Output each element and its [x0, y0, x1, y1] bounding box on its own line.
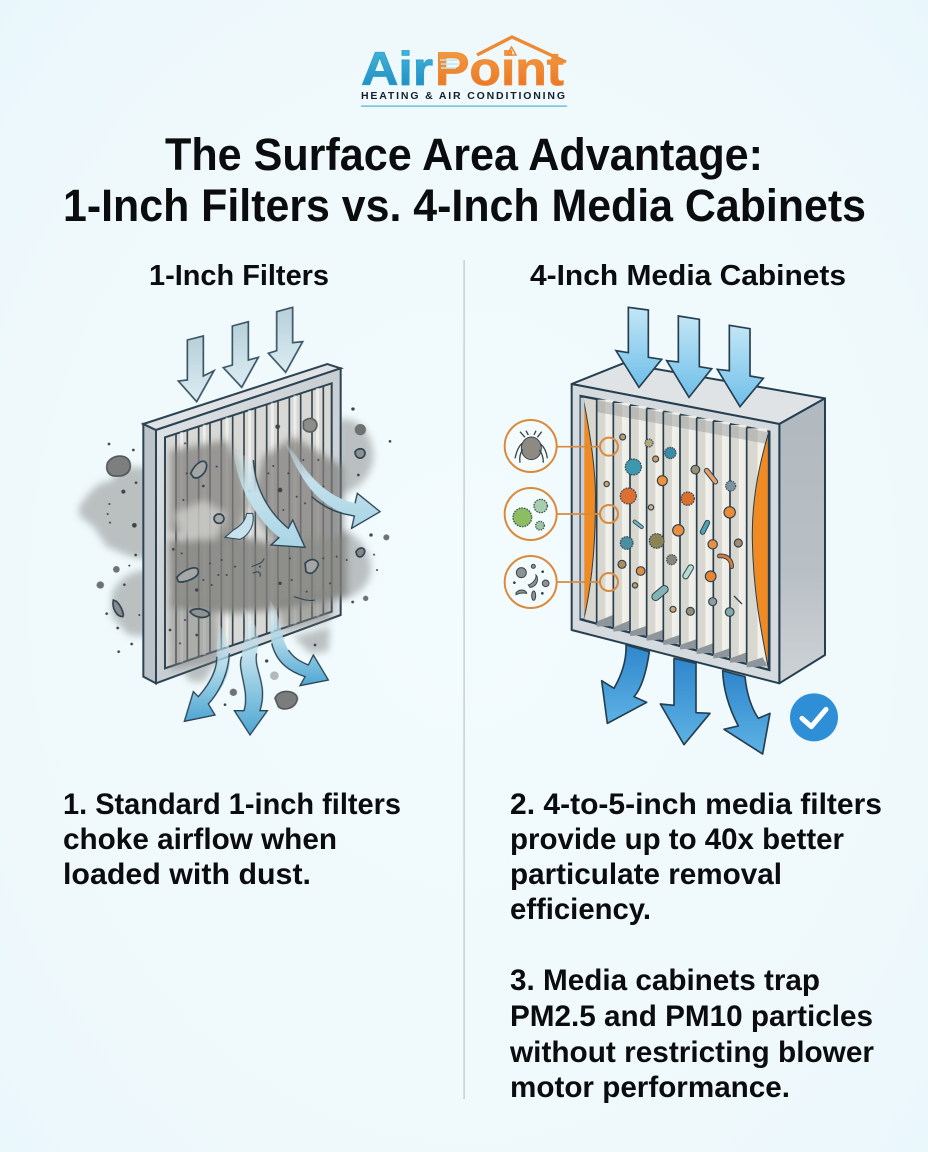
- orange side seals: [581, 397, 596, 618]
- logo roof: [477, 37, 566, 62]
- filter frame: [143, 364, 341, 430]
- logo air streaks: [440, 60, 458, 68]
- heading: 1-Inch Filters: 1-Inch Filters: [149, 260, 329, 292]
- text: point 3: without restricting blower: [509, 1036, 875, 1069]
- callout: mold spores: [505, 488, 618, 540]
- pleats: [165, 383, 332, 668]
- logo wordmark: Point: Point: [435, 42, 564, 95]
- debris clumps: [107, 419, 365, 709]
- logo wordmark: Air: Air: [361, 42, 433, 95]
- intake arrows: [616, 307, 763, 407]
- outer dust clouds: [78, 419, 373, 682]
- cabinet top face: [572, 363, 825, 424]
- title: [63, 129, 866, 231]
- callout: fine particles: [505, 556, 618, 608]
- pleated media: [581, 396, 769, 670]
- text: point 2: particulate removal: [510, 858, 782, 891]
- title: 1-Inch Filters vs. 4-Inch Media Cabinets: [63, 180, 866, 231]
- illustration: clogged 1-inch filter: [78, 307, 391, 735]
- text: point 3: PM2.5 and PM10 particles: [510, 1000, 873, 1033]
- logo underline: [361, 106, 567, 107]
- curved blocked airflow arrows: [225, 440, 380, 547]
- text: point 1: 1. Standard 1-inch filters: [63, 788, 401, 821]
- text: point 3: motor performance.: [510, 1071, 790, 1104]
- text: point 1: loaded with dust.: [63, 858, 311, 891]
- text: point 1: [63, 788, 401, 891]
- filter side edge: [143, 424, 156, 683]
- pleat top shadow: [597, 400, 767, 444]
- text: point 1: choke airflow when: [63, 823, 337, 856]
- logo: [361, 37, 567, 107]
- text: point 2: efficiency.: [510, 893, 651, 926]
- dust specks: [105, 407, 391, 706]
- column divider: [464, 260, 465, 1099]
- text: point 2: provide up to 40x better: [510, 823, 845, 856]
- intake arrows: [178, 307, 303, 402]
- text: point 2: [510, 788, 882, 926]
- callout: dust mite: [505, 420, 618, 472]
- pleat bottoms: [597, 615, 767, 667]
- text: point 2: 2. 4-to-5-inch media filters: [510, 788, 882, 821]
- text: point 3: [509, 964, 875, 1104]
- heading: 4-Inch Media Cabinets: 4-Inch Media Cabinets: [530, 260, 846, 292]
- text: point 3: 3. Media cabinets trap: [510, 964, 820, 997]
- cabinet side face: [779, 398, 825, 683]
- logo tagline: HEATING & AIR CONDITIONING: [361, 90, 565, 102]
- illustration: 4-inch media cabinet: [505, 307, 838, 754]
- cabinet front frame: [572, 384, 779, 683]
- check badge: [790, 693, 838, 741]
- trapped particles: [604, 434, 742, 616]
- leaking outflow arrows: [184, 600, 328, 735]
- dust load on filter: [168, 437, 347, 670]
- title: The Surface Area Advantage:: [165, 129, 763, 180]
- outflow arrows: [602, 645, 770, 754]
